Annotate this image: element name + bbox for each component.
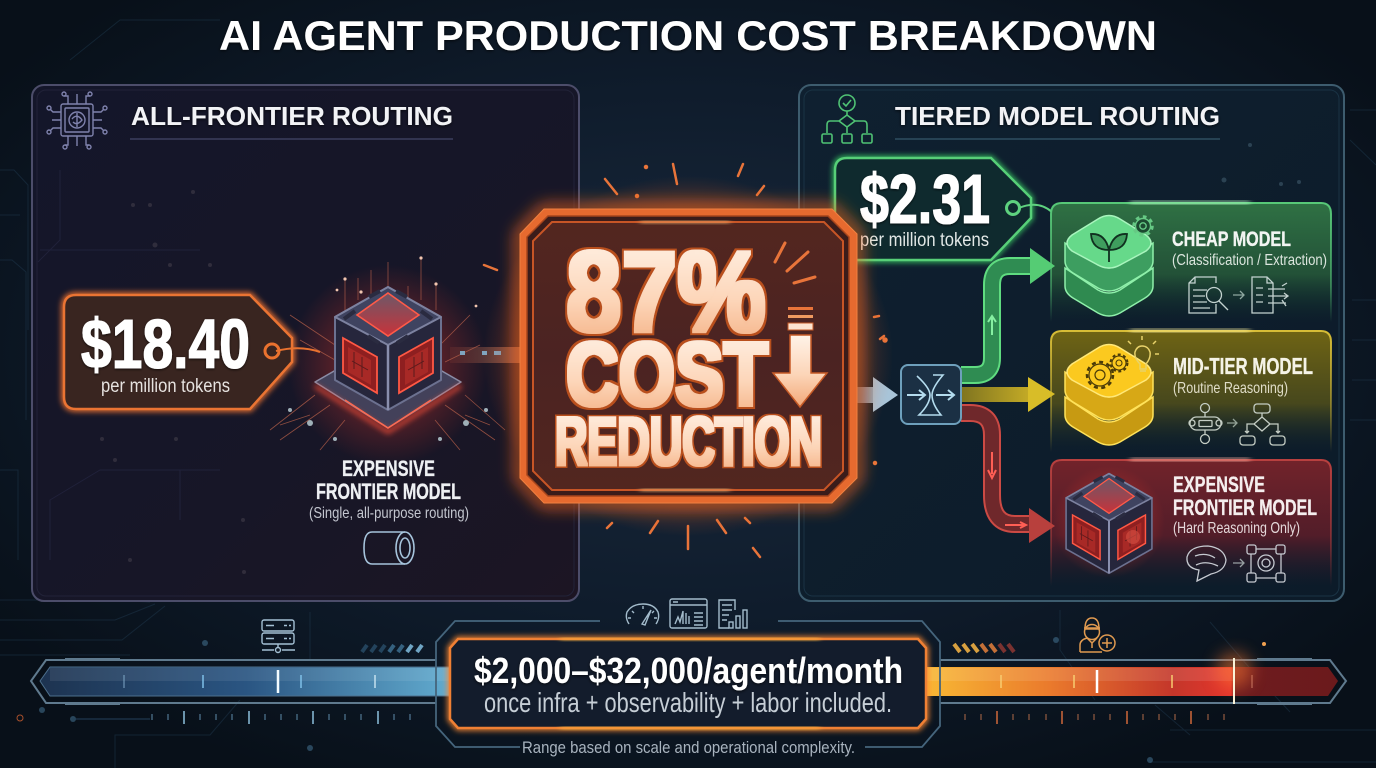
icon: report xyxy=(719,600,747,628)
price tag: $2.31 xyxy=(835,158,1052,260)
hatch: left xyxy=(362,645,422,652)
title: AI AGENT PRODUCTION COST BREAKDOWN xyxy=(219,12,1157,59)
icon: brain to network xyxy=(1187,545,1285,582)
price unit: per million tokens xyxy=(860,230,989,251)
connector: cube to reduction box xyxy=(450,347,522,363)
hatch: right xyxy=(954,644,1014,652)
icon: org chart xyxy=(822,95,872,143)
tick scale: right xyxy=(965,711,1224,724)
heading: all-frontier routing: ALL-FRONTIER ROUTING xyxy=(131,101,453,131)
label: mid-tier model: MID-TIER MODEL xyxy=(1173,353,1313,379)
icon: cylinder pipe xyxy=(364,532,414,564)
label: expensive frontier model: FRONTIER MODEL xyxy=(316,479,461,504)
icon: dashboard xyxy=(670,599,707,628)
label: expensive frontier model xyxy=(309,456,469,522)
sublabel: classification: (Classification / Extraction) xyxy=(1172,252,1327,269)
label: expensive frontier model: (Single, all-purpose routing) xyxy=(309,505,469,522)
icon: AI chip xyxy=(47,92,107,149)
price tag: $18.40 xyxy=(64,295,320,409)
cost range value: $2,000–$32,000/agent/month xyxy=(474,650,903,691)
inner burst lines xyxy=(775,243,815,283)
range bar: left blue xyxy=(31,658,452,705)
cost range note: once infra + observability + labor included. xyxy=(484,687,892,718)
callout: monthly cost range xyxy=(436,621,940,747)
sublabel: routine reasoning: (Routine Reasoning) xyxy=(1173,380,1288,397)
card: cheap model xyxy=(1051,201,1331,322)
icon: expensive frontier model cube xyxy=(270,256,505,465)
sparks around reduction box xyxy=(484,164,886,557)
icon: green model stack xyxy=(1065,216,1153,316)
footnote: Range based on scale and operational complexity. xyxy=(522,738,855,757)
card: mid-tier model xyxy=(1051,329,1331,452)
icon: server xyxy=(262,620,295,652)
icon: flow diagrams xyxy=(1189,404,1285,445)
range bar: right orange xyxy=(926,652,1346,705)
text: 87%: 87% xyxy=(566,229,766,356)
arrow: to mid-tier model xyxy=(961,377,1055,412)
price unit: per million tokens xyxy=(101,376,230,397)
icon: document search to extraction xyxy=(1189,277,1288,313)
text: reduction: REDUCTION xyxy=(555,403,822,480)
heading: tiered model routing: TIERED MODEL ROUTING xyxy=(895,101,1220,131)
tick scale: left xyxy=(72,711,410,724)
icon: gauge xyxy=(626,604,659,625)
arrow: into router xyxy=(857,377,898,412)
icon: red model cube xyxy=(1053,466,1165,578)
label: expensive frontier model xyxy=(1173,472,1317,520)
label: expensive frontier model: EXPENSIVE xyxy=(342,456,435,481)
text: cost: COST xyxy=(566,325,768,425)
panel: tiered model routing xyxy=(799,85,1344,601)
price value: $2.31 xyxy=(860,160,990,238)
label: expensive frontier model: FRONTIER MODEL xyxy=(1173,495,1317,520)
label: cheap model: CHEAP MODEL xyxy=(1172,228,1291,251)
sublabel: hard reasoning: (Hard Reasoning Only) xyxy=(1173,520,1300,537)
icon: yellow model stack xyxy=(1065,336,1159,445)
arrow: to expensive model xyxy=(961,413,1055,543)
label: expensive frontier model: EXPENSIVE xyxy=(1173,472,1265,497)
icon: worker add xyxy=(1080,618,1115,652)
icon: down arrow xyxy=(773,307,827,407)
panel: all-frontier routing xyxy=(32,85,579,601)
price value: $18.40 xyxy=(81,305,250,383)
icon: router node xyxy=(901,365,961,424)
card: expensive frontier model xyxy=(1051,458,1331,586)
callout: 87% cost reduction xyxy=(483,176,893,536)
arrow: to cheap model xyxy=(961,248,1055,375)
